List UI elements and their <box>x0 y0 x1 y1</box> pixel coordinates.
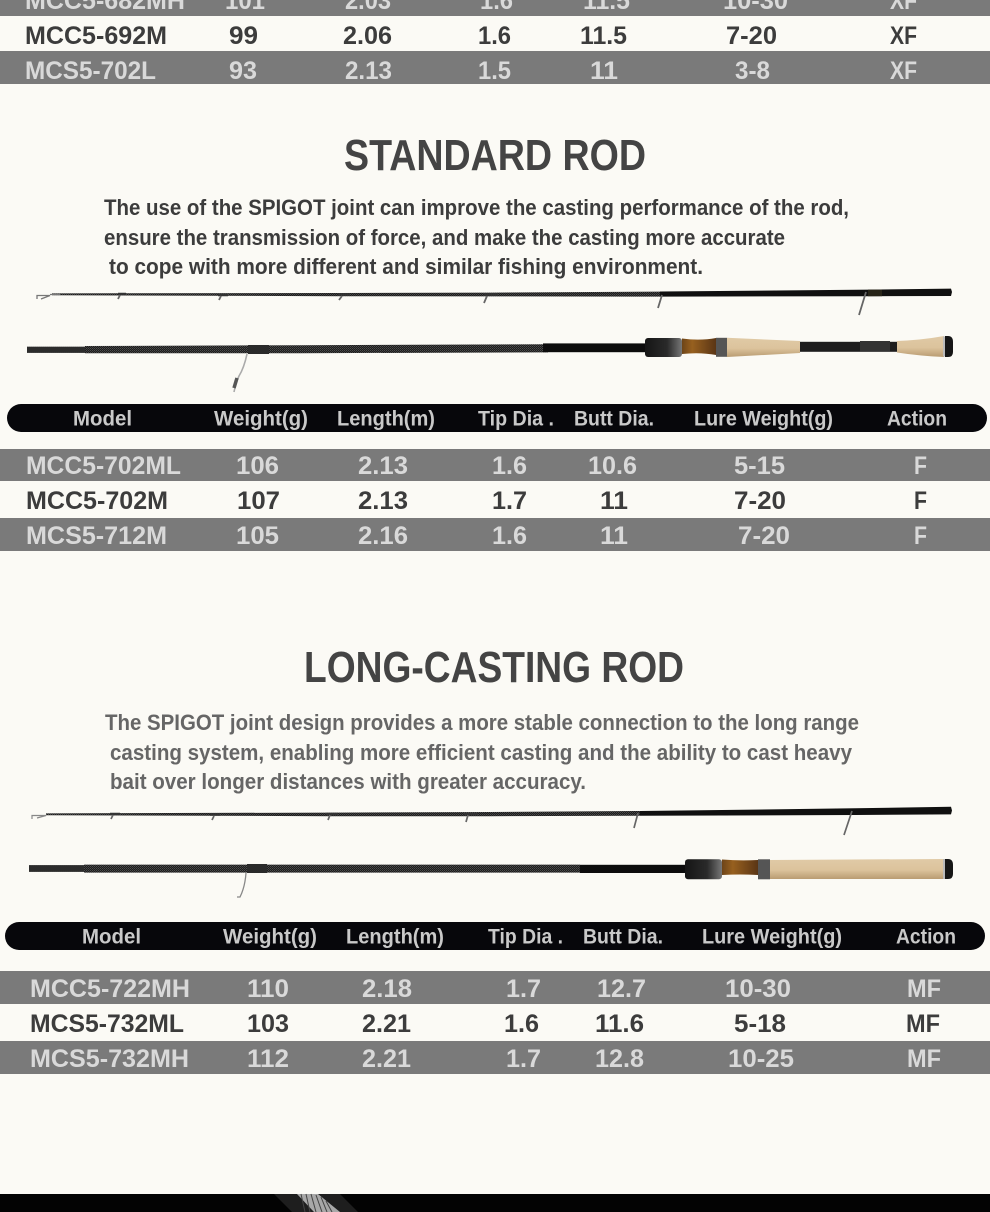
row: MCC5-702ML: 10.6 <box>588 452 637 480</box>
row: MCS5-732MH: MF <box>907 1045 941 1073</box>
table header: long-casting rod: Tip Dia . <box>488 926 563 948</box>
table header: standard rod: Tip Dia . <box>478 408 554 430</box>
row: MCS5-732MH: 2.21 <box>362 1045 411 1073</box>
table header: standard rod: Action <box>887 408 947 430</box>
row: MCS5-712M: 7-20 <box>738 522 790 550</box>
row: MCC5-702ML: 1.6 <box>492 452 527 480</box>
row: MCC5-692M: XF <box>890 22 917 50</box>
row: MCS5-712M: 105 <box>236 522 279 550</box>
row: MCS5-712M: 11 <box>600 522 628 550</box>
text block: long-casting rod description <box>105 710 859 794</box>
row: MCS5-732MH: 10-25 <box>728 1045 794 1073</box>
table header: long-casting rod: Butt Dia. <box>583 926 663 948</box>
row: MCC5-722MH: 12.7 <box>597 975 646 1003</box>
row: MCS5-732ML: 5-18 <box>734 1010 786 1038</box>
table header: long-casting rod <box>5 922 985 950</box>
row: MCS5-702L: MCS5-702L <box>25 57 156 85</box>
row: MCS5-702L: 2.13 <box>345 57 392 85</box>
row: MCS5-732MH: MCS5-732MH <box>30 1045 189 1073</box>
row: MCC5-702ML: 2.13 <box>358 452 408 480</box>
row: MCS5-712M: F <box>914 522 927 550</box>
row: MCC5-702M: 11 <box>600 487 628 515</box>
text block: long-casting rod description: The SPIGOT joint design provides a more stable connection to the long range <box>105 710 859 735</box>
row: MCC5-702M: 1.7 <box>492 487 527 515</box>
row: MCS5-732ML: MCS5-732ML <box>30 1010 184 1038</box>
row: MCC5-722MH: 2.18 <box>362 975 412 1003</box>
illustration: standard rod tip section <box>37 289 952 315</box>
table header: standard rod: Weight(g) <box>214 408 308 430</box>
row: MCC5-692M: 99 <box>229 22 258 50</box>
table header: standard rod: Length(m) <box>337 408 435 430</box>
row: MCS5-712M <box>0 518 990 551</box>
row: MCC5-682MH <box>0 0 990 16</box>
row: MCC5-692M: MCC5-692M <box>25 22 167 50</box>
text block: long-casting rod description: casting system, enabling more efficient casting and the ability to cast heavy <box>110 740 853 765</box>
table header: standard rod: Lure Weight(g) <box>694 408 833 430</box>
text block: standard rod description: ensure the transmission of force, and make the casting more accurate <box>104 225 785 250</box>
table: top rod specs (continued) <box>0 0 990 85</box>
heading: STANDARD ROD: STANDARD ROD <box>344 131 646 180</box>
row: MCS5-732ML: 1.6 <box>504 1010 539 1038</box>
row: MCS5-712M: 2.16 <box>358 522 408 550</box>
row: MCS5-732MH: 12.8 <box>595 1045 644 1073</box>
illustration: long-casting rod butt section with cork handle <box>29 859 953 897</box>
row: MCS5-702L: XF <box>890 57 917 85</box>
row: MCS5-702L: 93 <box>229 57 257 85</box>
row: MCS5-732ML: MF <box>906 1010 940 1038</box>
table header: long-casting rod: Lure Weight(g) <box>702 926 842 948</box>
row: MCC5-722MH: MF <box>907 975 941 1003</box>
row: MCC5-702ML <box>0 449 990 481</box>
text block: long-casting rod description: bait over longer distances with greater accuracy. <box>110 769 586 794</box>
table header: standard rod <box>7 404 987 432</box>
text block: standard rod description: The use of the SPIGOT joint can improve the casting performance of the rod, <box>104 195 849 220</box>
table header: long-casting rod: Action <box>896 926 956 948</box>
row: MCC5-692M: 7-20 <box>726 22 777 50</box>
table header: long-casting rod: Model <box>82 926 141 948</box>
row: MCC5-702ML: MCC5-702ML <box>26 452 181 480</box>
row: MCC5-702ML: 5-15 <box>734 452 785 480</box>
heading: LONG-CASTING ROD: LONG-CASTING ROD <box>304 643 684 692</box>
row: MCC5-702M: 107 <box>237 487 280 515</box>
text block: standard rod description: to cope with more different and similar fishing environment. <box>109 254 703 279</box>
row: MCC5-722MH <box>0 971 990 1004</box>
row: MCS5-732ML: 103 <box>247 1010 289 1038</box>
text block: standard rod description <box>104 195 849 279</box>
row: MCC5-702M <box>26 487 927 515</box>
illustration: standard rod butt section with cork handle <box>27 336 953 392</box>
table header: long-casting rod: Weight(g) <box>223 926 317 948</box>
bottom band with reel fragment <box>0 1194 990 1212</box>
row: MCS5-712M: MCS5-712M <box>26 522 167 550</box>
row: MCS5-732ML: 2.21 <box>362 1010 411 1038</box>
table: long-casting rod specs <box>0 971 990 1074</box>
row: MCC5-702ML: 106 <box>236 452 279 480</box>
row: MCS5-702L: 3-8 <box>735 57 770 85</box>
row: MCC5-722MH: 10-30 <box>725 975 791 1003</box>
table header: long-casting rod: Length(m) <box>346 926 444 948</box>
row: MCC5-722MH: MCC5-722MH <box>30 975 190 1003</box>
row: MCC5-722MH: 1.7 <box>506 975 541 1003</box>
table header: standard rod: Butt Dia. <box>574 408 654 430</box>
table header: standard rod: Model <box>73 408 132 430</box>
row: MCS5-702L: 11 <box>590 57 618 85</box>
row: MCC5-702M: 7-20 <box>734 487 786 515</box>
illustration: long-casting rod tip section <box>32 807 952 835</box>
row: MCC5-702M: 2.13 <box>358 487 408 515</box>
row: MCS5-732MH: 1.7 <box>506 1045 541 1073</box>
row: MCC5-692M: 1.6 <box>478 22 511 50</box>
row: MCC5-692M: 11.5 <box>580 22 627 50</box>
row: MCC5-722MH: 110 <box>247 975 289 1003</box>
table: standard rod specs <box>0 449 990 551</box>
row: MCS5-732MH <box>0 1041 990 1074</box>
row: MCS5-702L <box>0 51 990 85</box>
row: MCC5-702M: MCC5-702M <box>26 487 168 515</box>
row: MCC5-702M: F <box>914 487 927 515</box>
row: MCC5-692M: 2.06 <box>343 22 392 50</box>
row: MCS5-732ML <box>30 1010 940 1038</box>
row: MCS5-732MH: 112 <box>247 1045 289 1073</box>
row: MCS5-732ML: 11.6 <box>595 1010 644 1038</box>
row: MCS5-712M: 1.6 <box>492 522 527 550</box>
row: MCC5-692M <box>25 22 917 50</box>
row: MCC5-702ML: F <box>914 452 927 480</box>
row: MCS5-702L: 1.5 <box>478 57 511 85</box>
